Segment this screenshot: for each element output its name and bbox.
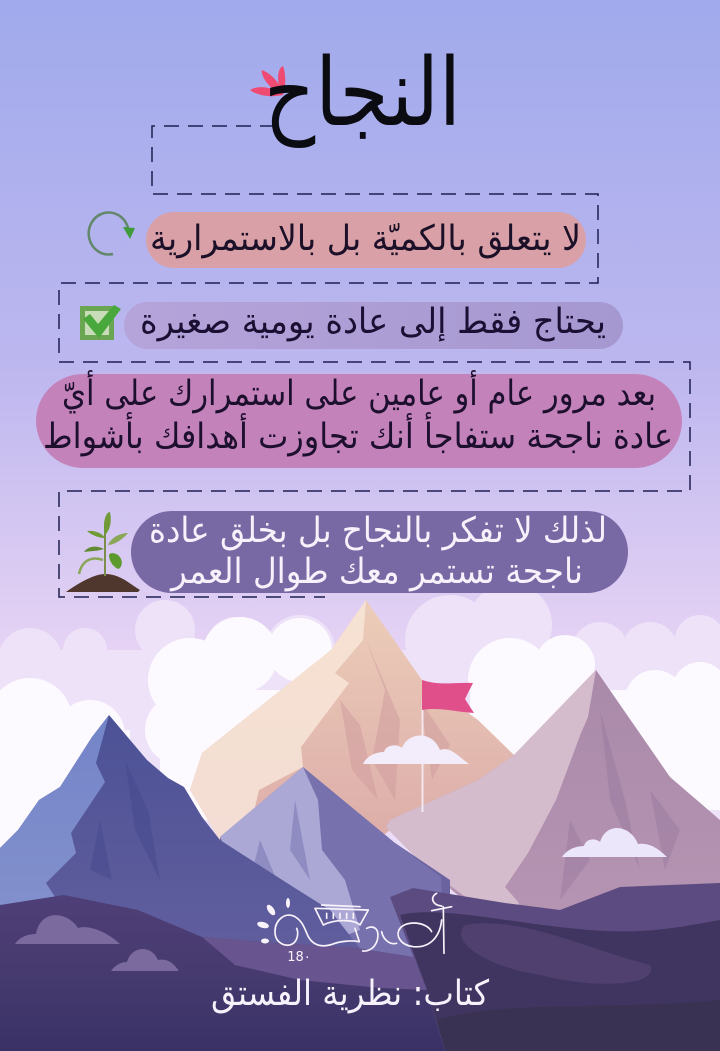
mountain base filler: [220, 838, 450, 1010]
mountain: left peak: [0, 715, 400, 1000]
panel: third message: [36, 370, 682, 468]
panel: first message: [146, 212, 586, 268]
logo: [256, 893, 452, 965]
text line 1: بعد مرور عام أو عامين على استمرارك على أيّ: [62, 370, 656, 414]
mountain: central peak: [190, 600, 520, 900]
icon: plant: [66, 512, 140, 592]
panel: first message: لا يتعلق بالكميّة بل بالاستمرارية: [150, 219, 581, 259]
cliff: [390, 883, 720, 1051]
foreground light band: [202, 937, 427, 990]
fourth message line 2: ناجحة تستمر معك طوال العمر: [169, 552, 583, 592]
logo sun rays: [256, 898, 290, 944]
title: [250, 39, 461, 148]
dashed snake outline: [59, 126, 690, 597]
cloud on central peak: [363, 736, 469, 764]
flag: [422, 680, 474, 812]
icon: cycle arrow: [89, 212, 135, 254]
cloud on right peak: [562, 828, 667, 857]
logo number: 18٠: [287, 950, 311, 965]
panel: fourth message: [131, 511, 628, 593]
source text: كتاب: نظرية الفستق: [211, 974, 489, 1014]
panel: second message: يحتاج فقط إلى عادة يومية صغيرة: [140, 302, 606, 342]
foreground hill: [0, 895, 445, 1051]
pale cloud layer: [0, 583, 720, 830]
small cloud on left hill: [111, 949, 179, 971]
mountain: right peak: [386, 670, 720, 940]
title text: النجاح: [264, 39, 461, 148]
white clouds: [0, 617, 720, 850]
icon: pink flower: [250, 66, 285, 96]
icon: check box: [80, 305, 121, 340]
text line 1: لذلك لا تفكر بالنجاح بل بخلق عادة: [149, 511, 607, 551]
logo wordmark: [275, 893, 452, 953]
third message line 2: عادة ناجحة ستفاجأ أنك تجاوزت أهدافك بأشواط: [43, 412, 673, 457]
mountain: small middle peak: [220, 767, 445, 960]
cloud on left hill: [15, 915, 120, 944]
